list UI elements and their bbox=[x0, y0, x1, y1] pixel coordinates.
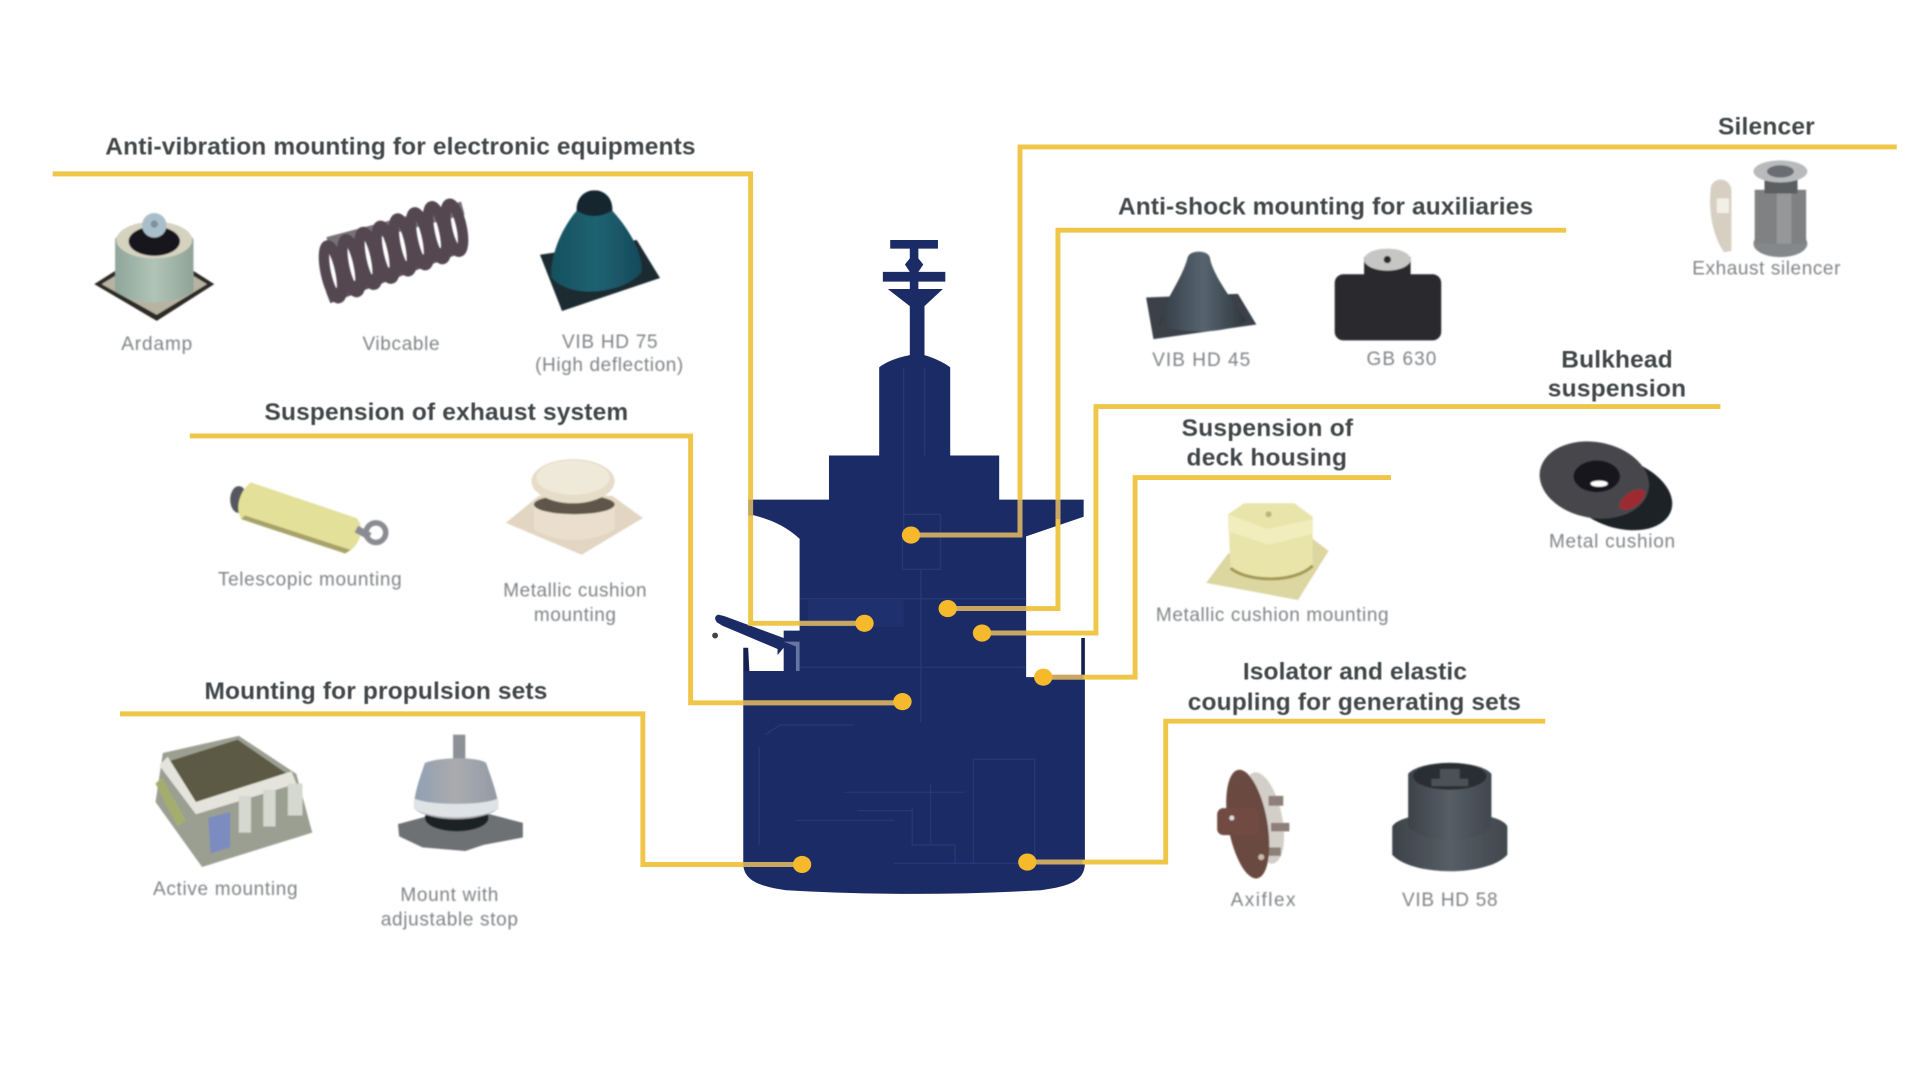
label: VIB HD 45: VIB HD 45 bbox=[1152, 350, 1250, 371]
panel: generating set couplings bbox=[1188, 659, 1521, 911]
label: VIB HD 58: VIB HD 58 bbox=[1402, 890, 1498, 911]
leader line: bulkhead bbox=[973, 407, 1720, 642]
label: Vibcable: Vibcable bbox=[362, 334, 440, 355]
icon: yellow metallic cushion mounting bbox=[1206, 503, 1329, 600]
icon: GB 630 bbox=[1335, 249, 1441, 340]
heading: deck housing: Suspension of bbox=[1182, 415, 1354, 442]
panel: electronic equipment mountings bbox=[94, 133, 696, 376]
icon: VIB HD 45 bbox=[1146, 252, 1256, 339]
heading: deck housing: deck housing bbox=[1187, 444, 1347, 471]
panel: deck housing suspension bbox=[1156, 415, 1389, 626]
panel: bulkhead suspension bbox=[1533, 346, 1686, 552]
heading: generating sets: Isolator and elastic bbox=[1243, 659, 1467, 686]
icon: Metal cushion bbox=[1533, 433, 1682, 543]
label: Mount with adjustable stop: Mount with bbox=[400, 885, 498, 906]
heading: exhaust system: Suspension of exhaust system bbox=[264, 399, 628, 426]
heading: propulsion sets: Mounting for propulsion sets bbox=[204, 678, 547, 705]
leader line: auxiliaries bbox=[939, 230, 1566, 617]
label: VIB HD 75: (High deflection) bbox=[535, 355, 683, 376]
heading: Silencer: Silencer bbox=[1718, 114, 1815, 141]
heading: deck housing bbox=[1182, 415, 1354, 471]
label: yellow metallic cushion mounting: Metallic cushion mounting bbox=[1156, 605, 1389, 626]
icon: Vibcable bbox=[320, 202, 467, 300]
icon: Active mounting bbox=[156, 736, 312, 867]
panel: auxiliaries mountings bbox=[1118, 193, 1533, 371]
icon: Exhaust silencer bbox=[1710, 160, 1807, 257]
heading: electronic equipment: Anti-vibration mounting for electronic equipments bbox=[105, 133, 696, 160]
heading: bulkhead suspension bbox=[1548, 346, 1686, 403]
label: Metallic cushion mounting: mounting bbox=[534, 605, 616, 626]
icon: Axiflex bbox=[1217, 766, 1291, 882]
label: Metallic cushion mounting: Metallic cushion bbox=[503, 580, 647, 601]
label: Metal cushion: Metal cushion bbox=[1549, 531, 1675, 552]
panel: propulsion set mountings bbox=[153, 678, 547, 931]
leader line: deck housing bbox=[1034, 478, 1391, 686]
label: VIB HD 75: VIB HD 75 bbox=[562, 332, 658, 353]
label: Telescopic mounting: Telescopic mounting bbox=[218, 569, 402, 590]
heading: bulkhead suspension: suspension bbox=[1548, 376, 1686, 403]
panel: exhaust system suspension bbox=[218, 399, 647, 626]
leader line: propulsion sets bbox=[120, 714, 811, 873]
label: Mount with adjustable stop bbox=[381, 885, 518, 931]
leader line: generating sets bbox=[1018, 721, 1545, 871]
leader line: exhaust system bbox=[190, 436, 912, 710]
label: VIB HD 75 bbox=[535, 332, 683, 376]
icon: Telescopic mounting bbox=[230, 482, 386, 553]
heading: generating sets: coupling for generating sets bbox=[1188, 689, 1521, 716]
heading: bulkhead suspension: Bulkhead bbox=[1561, 346, 1673, 373]
label: Exhaust silencer: Exhaust silencer bbox=[1692, 258, 1840, 279]
label: Ardamp: Ardamp bbox=[121, 334, 192, 355]
icon: VIB HD 75 bbox=[540, 190, 660, 311]
icon: VIB HD 58 bbox=[1392, 763, 1507, 871]
icon: Metallic cushion mounting bbox=[506, 459, 643, 555]
ship cross-section bbox=[712, 240, 1085, 894]
label: Metallic cushion mounting bbox=[503, 580, 647, 626]
leader line: electronic equipments bbox=[53, 174, 874, 632]
label: Axiflex: Axiflex bbox=[1231, 890, 1296, 911]
label: GB 630: GB 630 bbox=[1367, 349, 1436, 370]
label: Active mounting: Active mounting bbox=[153, 879, 298, 900]
heading: generating sets bbox=[1188, 659, 1521, 716]
icon: Mount with adjustable stop bbox=[398, 735, 523, 851]
label: Mount with adjustable stop: adjustable stop bbox=[381, 910, 518, 931]
panel: silencer bbox=[1692, 114, 1840, 279]
icon: Ardamp bbox=[94, 213, 214, 321]
heading: auxiliaries: Anti-shock mounting for auxiliaries bbox=[1118, 193, 1533, 220]
leader line: silencer bbox=[902, 147, 1897, 544]
